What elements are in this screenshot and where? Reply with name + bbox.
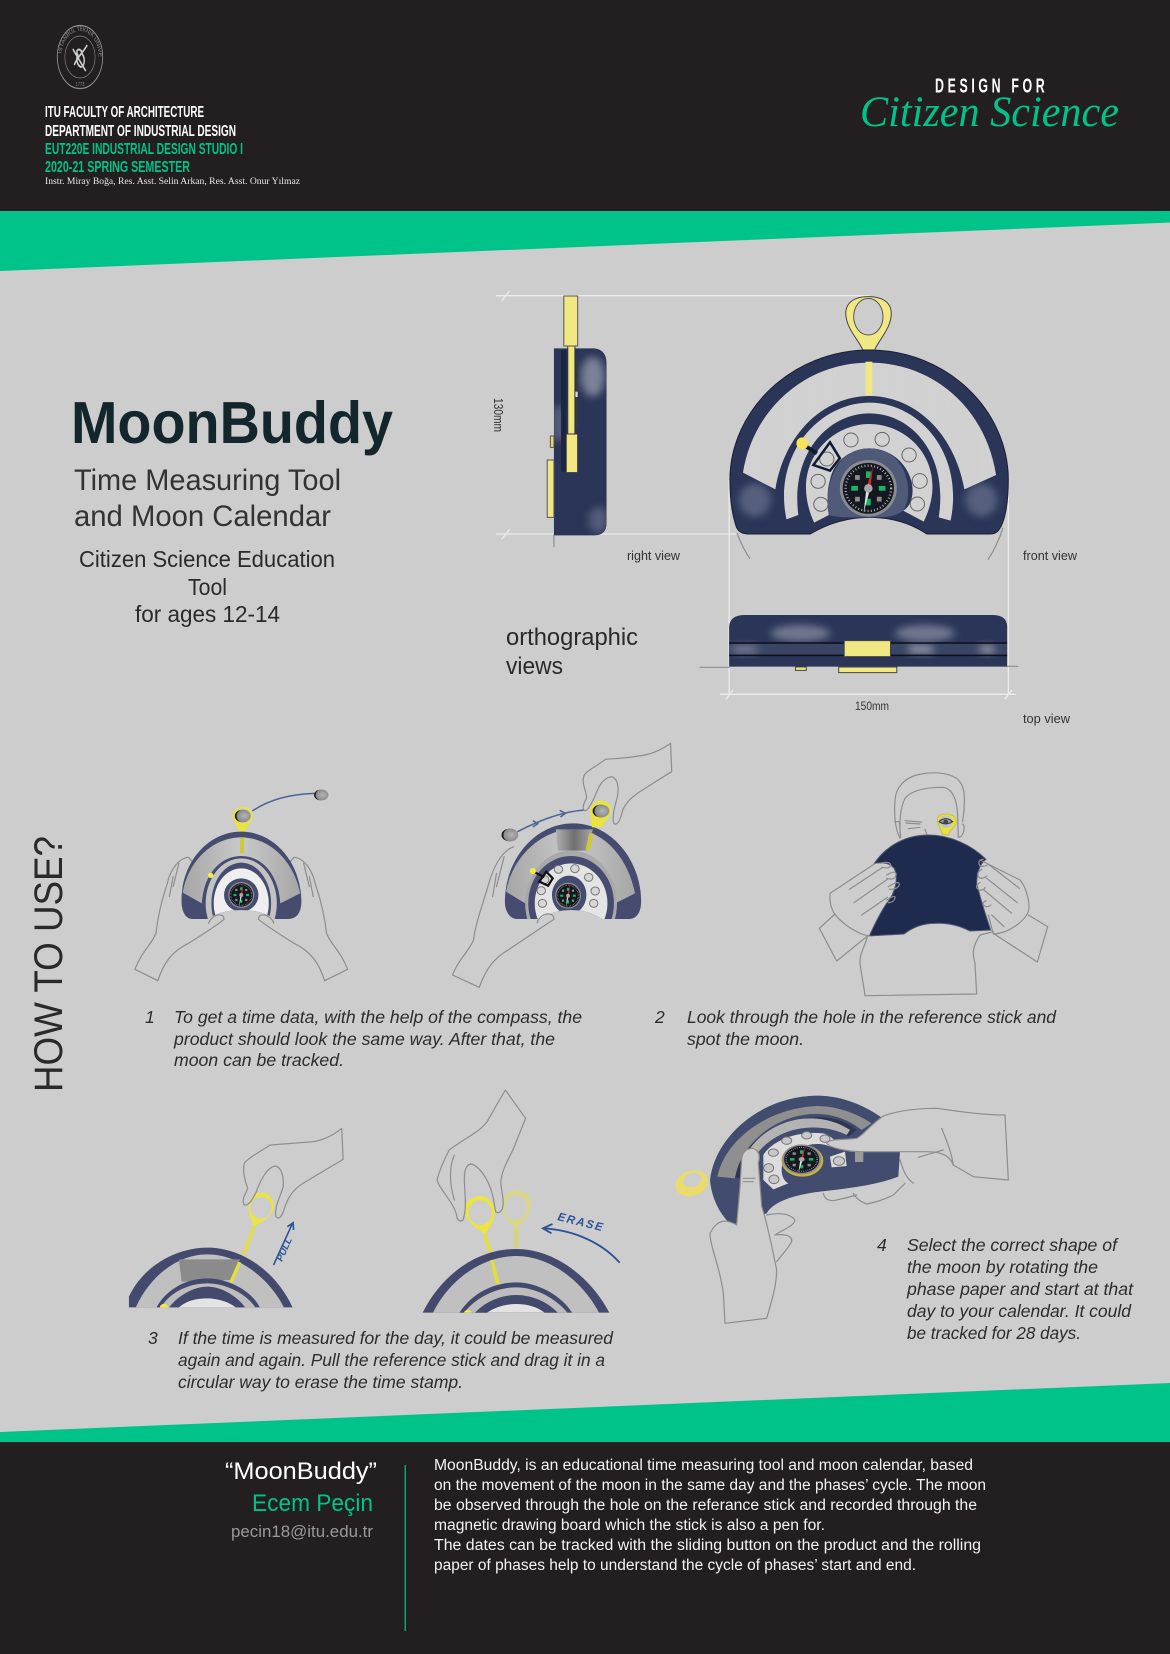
header institution text: EUT220E INDUSTRIAL DESIGN STUDIO I <box>45 141 243 158</box>
phase dial <box>806 424 932 523</box>
dimension and view labels: top view <box>1023 711 1071 726</box>
dimension and view labels: 130mm <box>491 398 506 432</box>
illustration: step 2 looking through the hole <box>819 773 1048 996</box>
step 1 instructions: moon can be tracked. <box>174 1050 344 1070</box>
step 4 instructions: day to your calendar. It could <box>907 1301 1132 1321</box>
reference ring B with moon <box>590 801 611 827</box>
torso <box>860 932 993 996</box>
header institution text: ITU FACULTY OF ARCHITECTURE <box>45 104 204 121</box>
moon <box>314 789 328 800</box>
fingers behind device <box>823 1183 905 1204</box>
hand erase view <box>437 1090 526 1221</box>
audience text: Tool <box>188 574 227 600</box>
yellow ring <box>672 1166 711 1201</box>
header institution text: 2020-21 SPRING SEMESTER <box>45 159 190 176</box>
section heading: how to use: HOW TO USE? <box>27 836 71 1092</box>
reference ring at eye <box>937 814 956 835</box>
header band <box>0 0 1170 271</box>
dimension and view labels: 150mm <box>855 699 889 713</box>
step 3 instructions: If the time is measured for the day, it could be measured <box>178 1328 614 1348</box>
subtitle: Time Measuring Tool <box>74 464 341 497</box>
moon arc path <box>252 793 315 811</box>
left hand <box>710 1148 777 1323</box>
header institution text <box>45 104 300 187</box>
device B <box>504 823 642 919</box>
dimension and view labels: right view <box>627 548 681 563</box>
header logotype: Design for Citizen Science: DESIGN FOR <box>935 74 1045 97</box>
audience text: Citizen Science Education <box>79 546 335 572</box>
thumbs <box>158 915 325 981</box>
header logotype: Design for Citizen Science: Citizen Science <box>860 89 1119 136</box>
hand pull view <box>243 1128 343 1218</box>
orthographic views drawing <box>496 291 1018 699</box>
step 4 instructions: the moon by rotating the <box>907 1257 1098 1277</box>
reference stick ring <box>846 297 891 350</box>
dimension lines <box>496 291 1018 699</box>
step 4 instructions <box>877 1235 1134 1343</box>
compass <box>781 1144 823 1177</box>
ghost stick and ring <box>502 1190 531 1248</box>
moon arc path with arrows <box>518 810 584 832</box>
erase label: ERASE <box>556 1211 604 1234</box>
hands behind device A <box>135 857 348 981</box>
right hand <box>827 1108 1008 1180</box>
reference ring with moon <box>232 807 253 831</box>
illustration: step 3 pull and erase <box>129 1090 620 1313</box>
orthographic views label: orthographic <box>506 624 638 651</box>
audience text <box>79 546 335 627</box>
hand behind device B <box>452 847 514 987</box>
thumb B <box>479 914 554 987</box>
grey sunken arcs <box>717 1106 872 1178</box>
person head <box>895 773 964 838</box>
illustration: step 4 rotating phase paper <box>672 1096 1008 1323</box>
project description: magnetic drawing board which the stick is also a pen for. <box>434 1517 825 1534</box>
header institution text: DEPARTMENT OF INDUSTRIAL DESIGN <box>45 123 236 140</box>
project credit: Ecem Peçin <box>252 1490 373 1517</box>
project description: be observed through the hole on the referance stick and recorded through the <box>434 1497 977 1514</box>
step 3 instructions <box>148 1328 614 1392</box>
stick and ring erase view <box>465 1196 500 1284</box>
audience text: for ages 12-14 <box>135 601 280 627</box>
project description: The dates can be tracked with the sliding button on the product and the rolling <box>434 1537 981 1554</box>
stick and ring pull view <box>229 1193 274 1283</box>
device A <box>182 832 302 919</box>
project description <box>434 1457 986 1574</box>
date track <box>784 403 953 521</box>
moon start <box>501 828 518 841</box>
sleeves <box>819 914 1048 962</box>
project description: paper of phases help to understand the cycle of phases’ start and end. <box>434 1557 916 1574</box>
top view <box>729 615 1007 673</box>
university logo <box>56 24 104 90</box>
step 2 instructions: spot the moon. <box>687 1029 804 1049</box>
erase arrow <box>543 1224 620 1263</box>
project description: on the movement of the moon in the same day and the phases’ cycle. The moon <box>434 1477 986 1494</box>
device back <box>869 835 991 936</box>
hands on device <box>830 859 1029 936</box>
subtitle: and Moon Calendar <box>74 500 331 533</box>
project credit: pecin18@itu.edu.tr <box>231 1522 373 1541</box>
university logo: 1773 <box>76 81 85 88</box>
footer divider <box>404 1465 406 1631</box>
top hand B <box>583 743 672 824</box>
step 1 instructions: 1 <box>145 1007 155 1027</box>
step 4 instructions: phase paper and start at that <box>906 1279 1134 1299</box>
orthographic views label <box>506 624 638 680</box>
step 1 instructions: product should look the same way. After that, the <box>173 1029 555 1049</box>
body <box>730 350 1008 534</box>
step 1 instructions <box>145 1007 582 1070</box>
device pull view <box>129 1248 293 1307</box>
orthographic views label: views <box>506 653 563 680</box>
honeycomb panel <box>743 363 996 489</box>
step 2 instructions <box>654 1007 1057 1049</box>
title: MoonBuddy <box>71 390 393 456</box>
step 4 instructions: 4 <box>877 1235 887 1255</box>
dimension and view labels: front view <box>1023 548 1078 563</box>
front view <box>730 297 1008 534</box>
step 3 instructions: 3 <box>148 1328 158 1348</box>
subtitle <box>74 464 341 533</box>
device erase view <box>423 1249 609 1313</box>
pull arrow <box>274 1223 294 1265</box>
step 2 instructions: Look through the hole in the reference stick and <box>687 1007 1057 1027</box>
step 3 instructions: again and again. Pull the reference stick and drag it in a <box>178 1350 605 1370</box>
project description: MoonBuddy, is an educational time measuring tool and moon calendar, based <box>434 1457 973 1474</box>
device body <box>710 1096 900 1225</box>
step 1 instructions: To get a time data, with the help of the compass, the <box>174 1007 582 1027</box>
project credit <box>225 1458 377 1541</box>
dimension and view labels <box>491 398 1078 726</box>
project credit: “MoonBuddy” <box>225 1458 377 1485</box>
right view <box>547 296 609 535</box>
phase dial <box>763 1133 837 1189</box>
step 4 instructions: be tracked for 28 days. <box>907 1323 1081 1343</box>
footer band <box>0 1383 1170 1654</box>
step 3 instructions: circular way to erase the time stamp. <box>178 1372 463 1392</box>
illustration: step 1 tracking the moon, two views <box>135 743 672 987</box>
step 4 instructions: Select the correct shape of <box>907 1235 1119 1255</box>
university logo: İSTANBUL TEKNİK ÜNİVERSİTESİ <box>58 26 102 57</box>
pull label: PULL <box>275 1236 295 1263</box>
header institution text: Instr. Miray Boğa, Res. Asst. Selin Arkan, Res. Asst. Onur Yılmaz <box>45 177 300 187</box>
step 2 instructions: 2 <box>654 1007 665 1027</box>
